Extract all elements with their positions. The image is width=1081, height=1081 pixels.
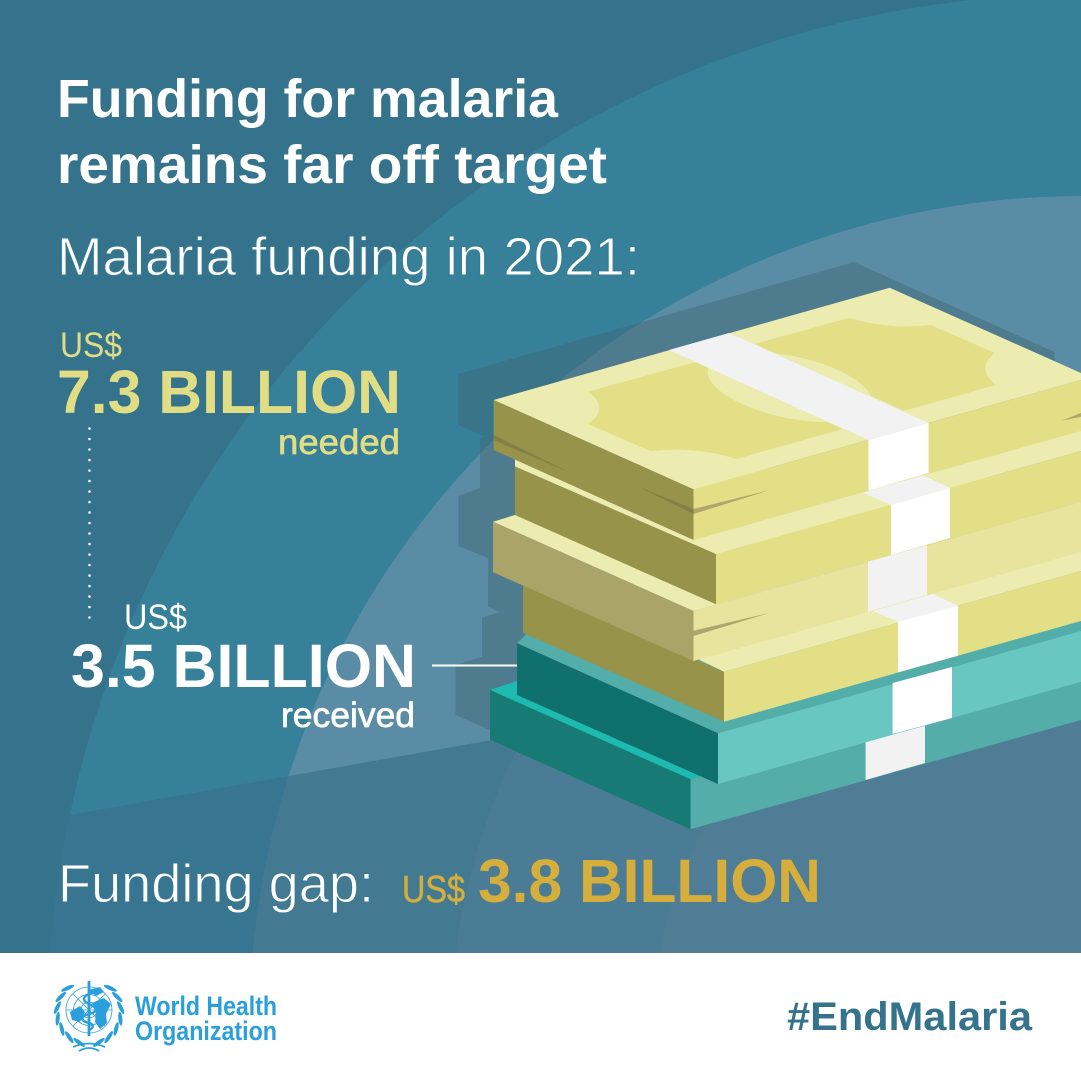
title: remains far off target [57,135,607,195]
logo wordmark: World Health [135,991,277,1021]
globe [66,987,112,1033]
figure: 3.5 billion received: US$ [124,598,187,637]
continents [70,987,111,1029]
dotted connector [88,428,91,618]
hashtag: #EndMalaria [787,995,1033,1039]
yellow bundle, top [494,288,1081,540]
teal bundle, upper [517,600,1081,784]
title: Funding for malaria [57,69,559,129]
rod and serpent [88,981,90,1036]
figure: 7.3 billion needed: needed [278,423,400,462]
logo wordmark [135,991,277,1046]
funding gap: Funding gap: [58,854,374,914]
figure: 7.3 billion needed [57,326,401,462]
funding gap: 3.8 BILLION [478,847,821,915]
wreath tie [73,1044,105,1051]
yellow bundle, fourth [523,540,1081,722]
funding gap: US$ [402,869,465,911]
icon: WHO emblem [52,981,126,1051]
teal bundle, bottom [490,670,1081,829]
laurel wreath [52,984,126,1048]
funding gap [58,847,821,915]
pale bundle, third [493,470,1081,661]
footer band [0,953,1081,1081]
cash stack shadow [456,262,1054,730]
figure: 7.3 billion needed: US$ [60,326,122,365]
yellow bundle, second [515,420,1081,604]
subtitle: Malaria funding in 2021: [57,227,640,287]
figure: 7.3 billion needed: 7.3 BILLION [57,358,401,426]
logo wordmark: Organization [135,1016,277,1046]
title [57,69,607,195]
leader line [432,664,517,666]
illustration: stack of banknotes [490,288,1081,829]
figure: 3.5 billion received [71,598,416,735]
figure: 3.5 billion received: received [281,696,415,735]
figure: 3.5 billion received: 3.5 BILLION [71,632,416,700]
